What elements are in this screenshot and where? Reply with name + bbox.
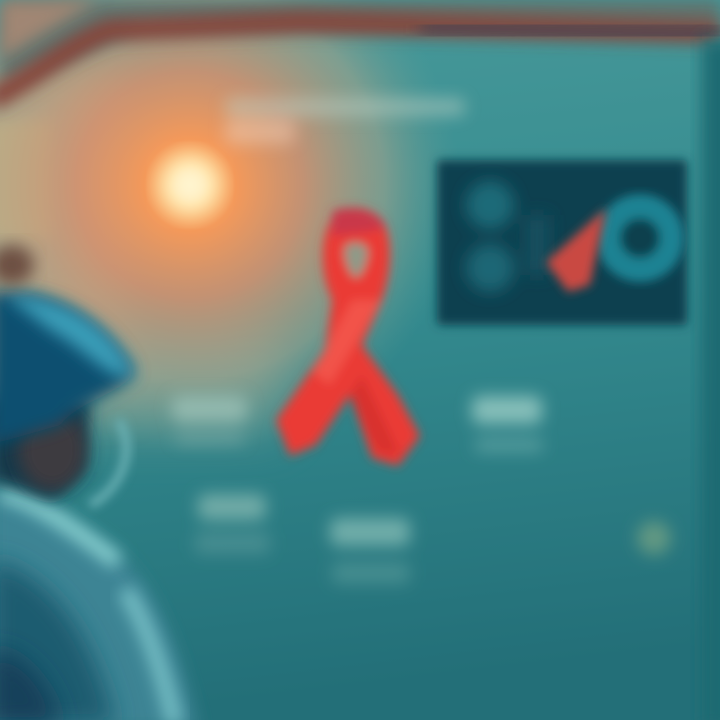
foreground person <box>0 245 198 720</box>
blurred text labels <box>172 396 671 584</box>
label right <box>472 396 543 452</box>
faint yellow dot <box>637 521 671 555</box>
person body <box>0 485 198 720</box>
left warm wall <box>0 60 280 430</box>
panel ring <box>608 206 672 270</box>
glowing lamp <box>0 0 460 455</box>
top ceiling and dark red band <box>0 0 720 100</box>
label bottom left <box>195 494 270 554</box>
panel icons <box>466 181 549 292</box>
panel red ribbon <box>546 208 606 292</box>
blurred heading <box>225 98 465 144</box>
label bottom center <box>330 518 410 584</box>
label left <box>172 396 247 444</box>
red awareness ribbon <box>276 208 420 466</box>
mask loop <box>90 420 126 505</box>
right wall edge shading <box>702 40 720 720</box>
hair tuft <box>0 245 34 285</box>
dark chart panel <box>437 160 687 325</box>
person neck and face <box>0 400 90 500</box>
person cap <box>0 291 135 445</box>
